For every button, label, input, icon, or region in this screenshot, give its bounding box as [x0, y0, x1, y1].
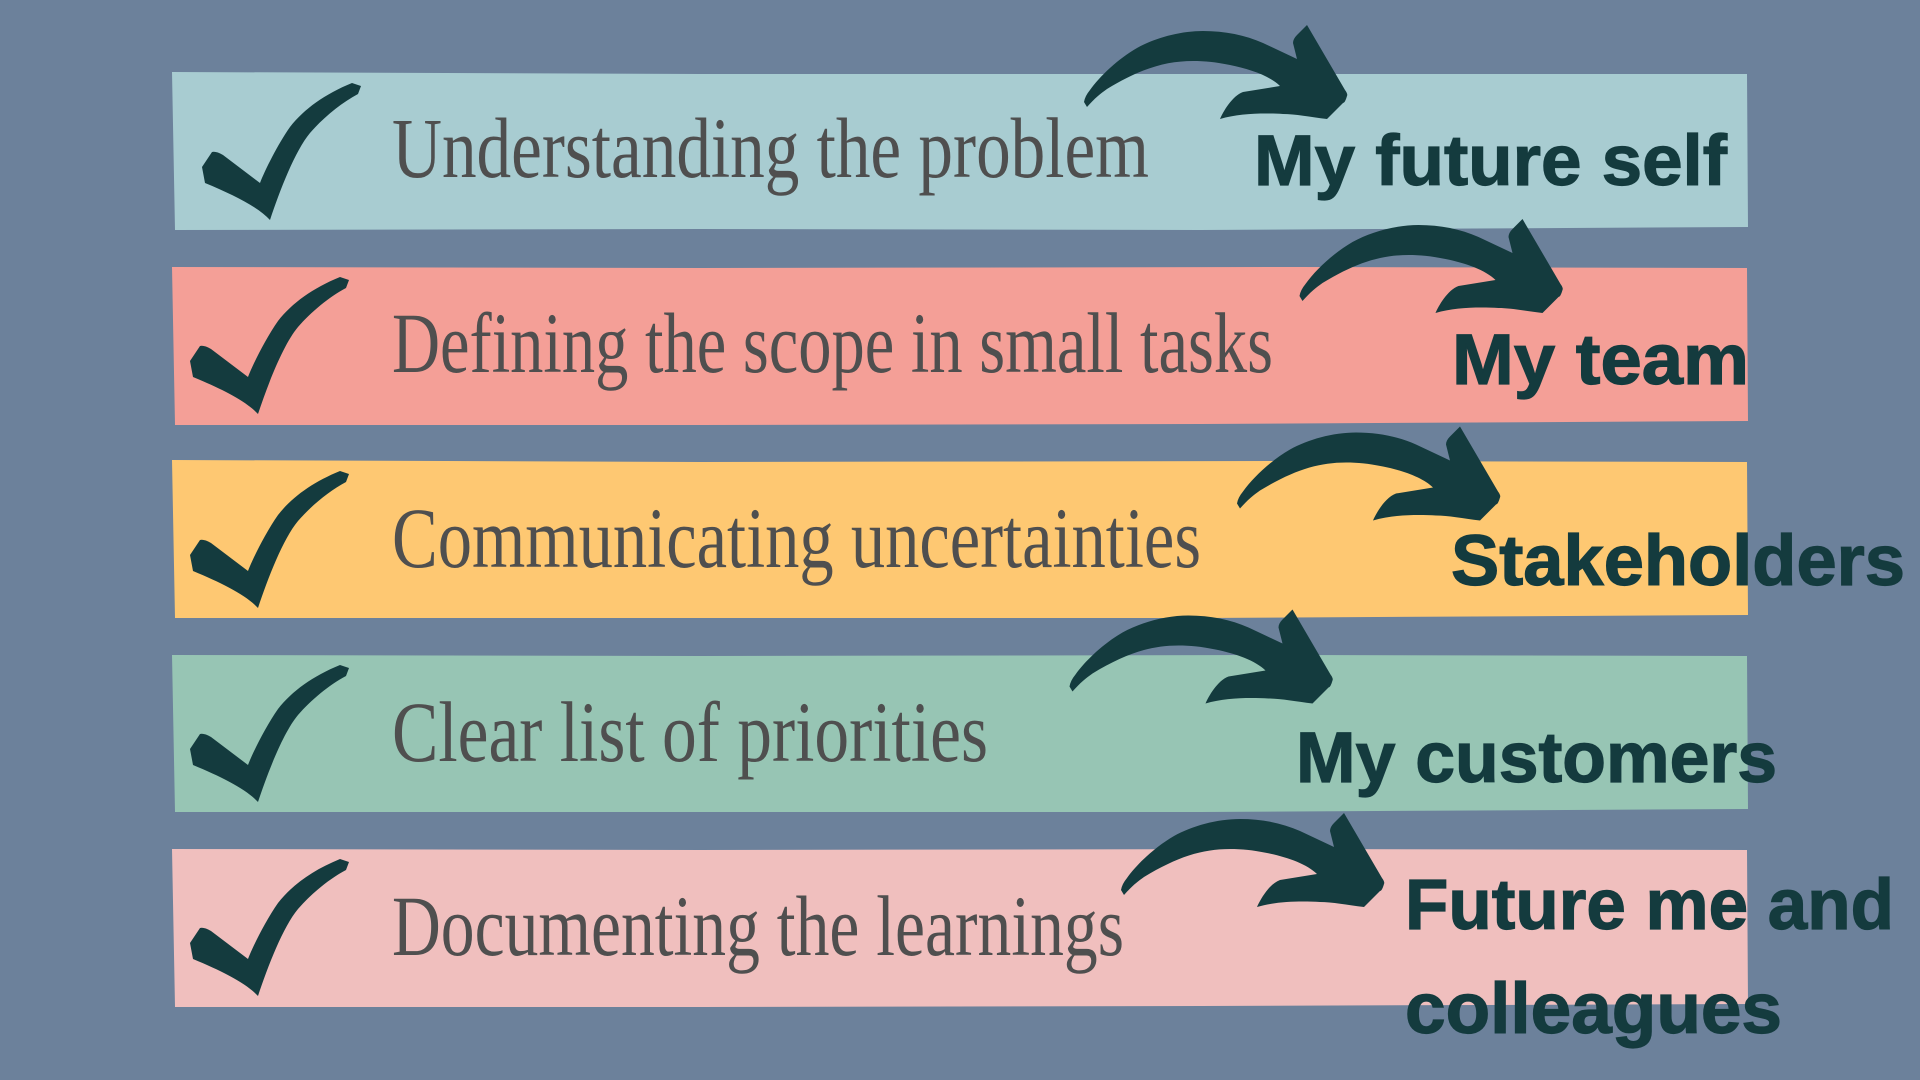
text: clear list of priorities: Clear list of priorities — [392, 684, 988, 780]
row 2: defining the scope — [172, 219, 1749, 425]
arrow 1 — [1084, 25, 1347, 119]
bar 5 background — [172, 849, 1748, 1007]
text: communicating uncertainties: Communicating uncertainties — [392, 490, 1201, 586]
icon: check mark 2 — [190, 277, 349, 414]
label: future me and colleagues: colleagues — [1405, 970, 1782, 1049]
label: my team: My team — [1452, 321, 1749, 400]
arrow 5 — [1121, 813, 1384, 907]
row 5: documenting the learnings — [172, 813, 1894, 1049]
label: my customers: My customers — [1296, 719, 1777, 798]
row 4: clear list of priorities — [172, 610, 1777, 812]
icon: check mark 3 — [190, 471, 349, 608]
bar 1 background — [172, 72, 1748, 230]
bar 4 background — [172, 655, 1748, 812]
row 3: communicating uncertainties — [172, 426, 1905, 618]
text: documenting the learnings: Documenting the learnings — [392, 878, 1124, 974]
row 1: understanding the problem — [172, 25, 1748, 230]
icon: check mark 5 — [190, 859, 349, 996]
label: future me and colleagues: Future me and — [1405, 866, 1894, 945]
text: understanding the problem: Understanding the problem — [392, 100, 1149, 196]
arrow 2 — [1300, 219, 1563, 313]
arrow 4 — [1070, 610, 1333, 704]
label: my future self: My future self — [1254, 122, 1727, 201]
icon: check mark 4 — [190, 665, 349, 802]
label: stakeholders: Stakeholders — [1451, 522, 1905, 601]
icon: check mark 1 — [202, 83, 361, 220]
text: defining the scope in small tasks: Defining the scope in small tasks — [392, 295, 1273, 391]
bar 2 background — [172, 267, 1748, 425]
bar 3 background — [172, 460, 1748, 618]
arrow 3 — [1237, 426, 1500, 520]
